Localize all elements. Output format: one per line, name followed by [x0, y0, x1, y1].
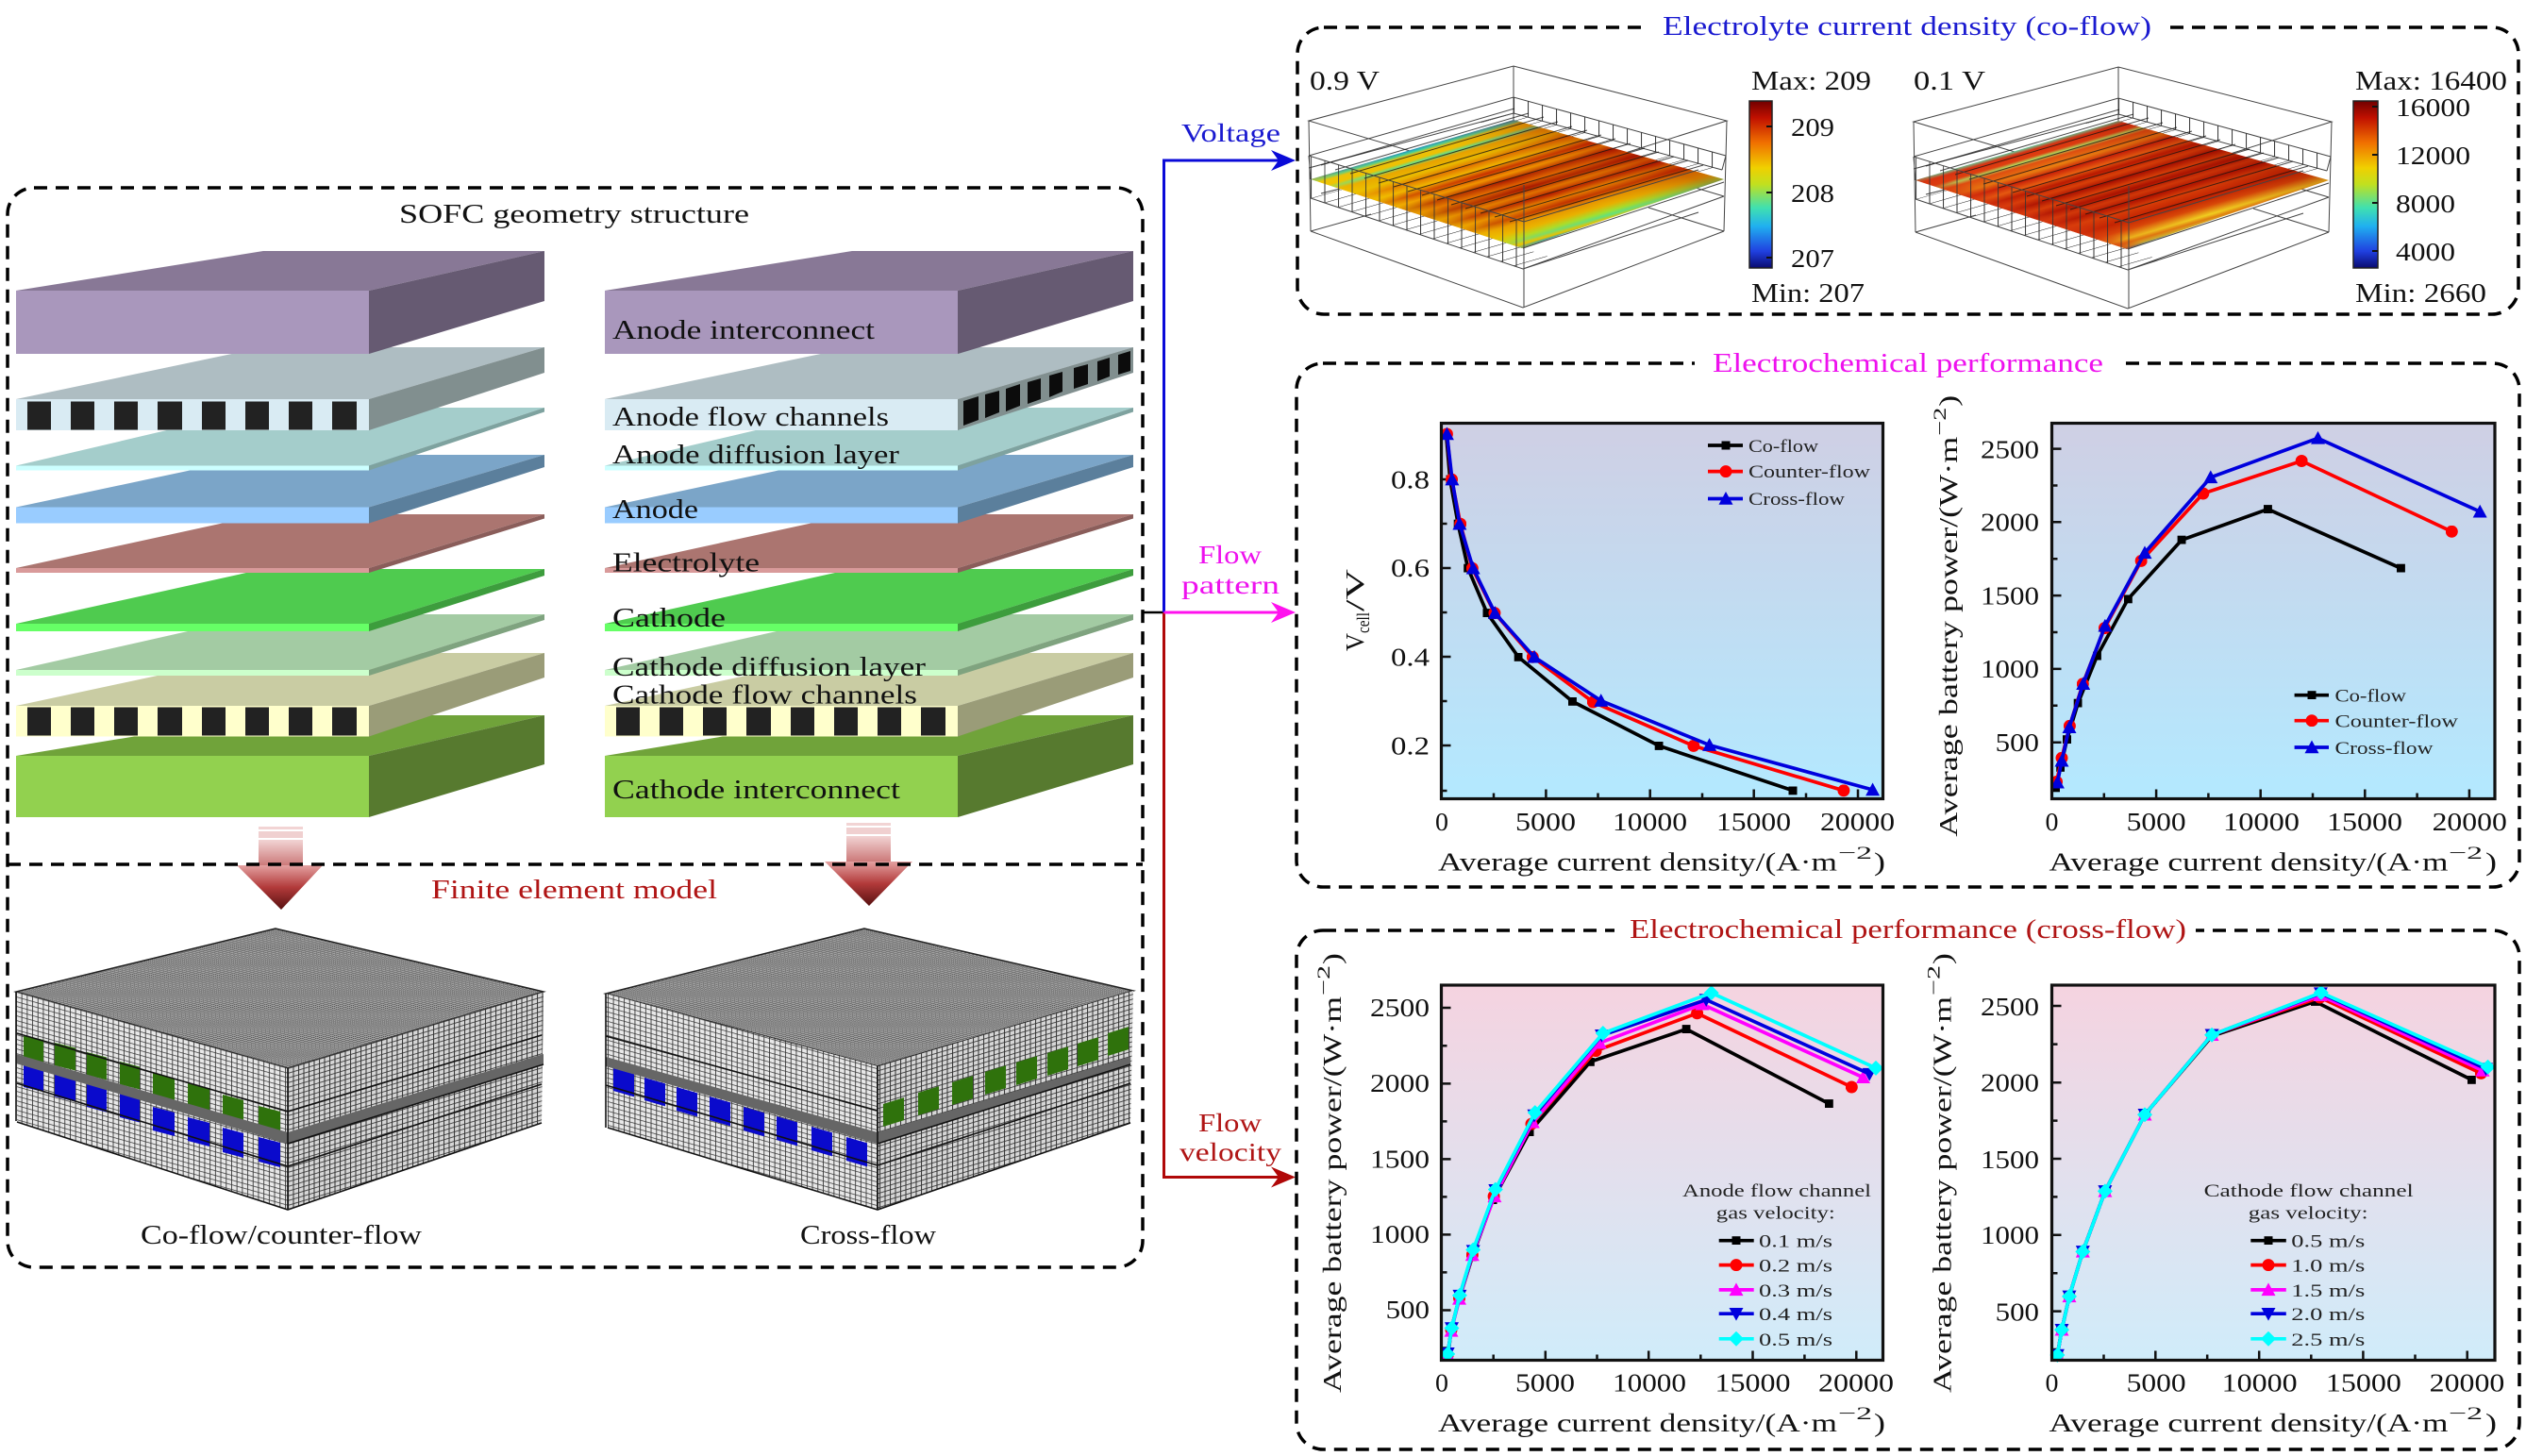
- y axis title: Average battery power/(W·m: [1318, 996, 1347, 1393]
- legend: 0.5 m/s: [2291, 1232, 2365, 1252]
- heading: finite element model: Finite element model: [431, 875, 717, 905]
- anode channels: green: [883, 1027, 1129, 1127]
- series: co-flow: [1447, 434, 1793, 791]
- series: 2.0 m/s: [2057, 994, 2485, 1355]
- y axis title: V cell / V: /V: [1341, 568, 1369, 611]
- panel: electrochemical performance: [1296, 348, 2519, 887]
- x tick labels: 15000: [2326, 1368, 2401, 1397]
- y tick labels: [1370, 994, 1430, 1324]
- series: cross-flow: [1447, 434, 1873, 790]
- layer: cathode interconnect: [16, 715, 544, 817]
- x axis title: [2049, 844, 2497, 877]
- x tick labels: 0: [1435, 1368, 1448, 1397]
- legend: 2.5 m/s: [2291, 1330, 2365, 1350]
- y axis title: ): [1934, 395, 1963, 407]
- y tick labels: 2000: [1981, 1068, 2039, 1096]
- layer: cathode diffusion layer: [605, 614, 1133, 676]
- colour bar: 207 to 209: 208: [1791, 179, 1834, 208]
- cathode channels: blue: [24, 1064, 280, 1167]
- y tick labels: 1500: [1981, 1146, 2039, 1174]
- legend: 0.3 m/s: [1759, 1281, 1832, 1301]
- series: 0.1 m/s: [1448, 1029, 1829, 1355]
- y tick labels: 1000: [1981, 655, 2039, 683]
- x tick labels: 10000: [1613, 808, 1687, 836]
- y tick labels: 2000: [1370, 1069, 1430, 1097]
- layer labels: Anode flow channels: [612, 402, 889, 432]
- legend: Cathode flow channel: [2204, 1181, 2414, 1201]
- x axis title: Average current density/(A·m: [1438, 1409, 1837, 1437]
- y tick labels: 1000: [1370, 1220, 1430, 1248]
- y tick labels: 1000: [1981, 1221, 2039, 1249]
- x axis title: −2: [2449, 844, 2483, 863]
- line chart: power vs current density by flow pattern: [1931, 395, 2507, 877]
- arrow label: flow pattern: Flow: [1198, 541, 1263, 569]
- layer: anode: [16, 455, 544, 523]
- x tick labels: 5000: [2127, 808, 2186, 836]
- x axis title: ): [1874, 1409, 1885, 1437]
- x tick labels: 15000: [1715, 1368, 1791, 1397]
- arrow label: flow velocity: [1179, 1109, 1282, 1166]
- layer labels: Cathode diffusion layer: [612, 652, 926, 682]
- y tick labels: 0.6: [1391, 554, 1430, 582]
- arrow label: voltage: Voltage: [1181, 119, 1280, 147]
- electrolyte band: [16, 1054, 544, 1144]
- layer: cathode: [16, 569, 544, 631]
- series: 1.5 m/s: [2057, 996, 2483, 1355]
- y tick labels: 2500: [1370, 994, 1430, 1022]
- line chart: anode flow channel gas velocity: [1314, 953, 1894, 1437]
- layer labels: Anode: [612, 494, 698, 525]
- x tick labels: 15000: [1716, 808, 1791, 836]
- layer: cathode flow channels: [16, 653, 544, 736]
- layer labels: Electrolyte: [612, 547, 760, 577]
- x tick labels: 0: [2046, 808, 2059, 836]
- label: max 209: Max: 209: [1751, 66, 1871, 96]
- y axis title: ): [1929, 953, 1957, 964]
- cathode channels: blue: [613, 1068, 867, 1166]
- exploded stack: right column: [605, 251, 1133, 817]
- arrow label: flow velocity: Flow: [1198, 1109, 1263, 1137]
- legend: [1682, 1181, 1871, 1350]
- legend: 2.0 m/s: [2291, 1305, 2365, 1325]
- y tick labels: 0.2: [1391, 732, 1430, 761]
- series: co-flow: [2056, 510, 2401, 788]
- x axis title: −2: [2449, 1404, 2483, 1424]
- x axis title: ): [1874, 848, 1885, 877]
- y axis title: −2: [1931, 408, 1950, 436]
- legend: Counter-flow: [2334, 712, 2458, 732]
- layer: cathode diffusion layer: [16, 614, 544, 676]
- panel: SOFC geometry structure and finite element model: [8, 188, 1143, 1267]
- colour bar: 207 to 209: 209: [1791, 113, 1834, 142]
- caption: co-flow/counter-flow: Co-flow/counter-flow: [141, 1220, 422, 1250]
- y tick labels: 2000: [1981, 509, 2039, 537]
- layer: anode interconnect: [605, 251, 1133, 354]
- colour bar: 2660 to 16400: [2353, 93, 2470, 268]
- arrow: stack to cross-flow mesh: [825, 823, 912, 906]
- legend: 0.4 m/s: [1759, 1305, 1832, 1325]
- y tick labels: 500: [1386, 1296, 1430, 1324]
- layer: cathode interconnect: [605, 715, 1133, 817]
- layer labels: Anode interconnect: [612, 315, 875, 345]
- y axis title: V cell / V: [1341, 568, 1374, 651]
- x tick labels: 5000: [1515, 808, 1576, 836]
- y tick labels: 0.8: [1391, 465, 1430, 494]
- arrow: stack to co-flow mesh: [237, 827, 323, 910]
- series: counter-flow: [1447, 434, 1844, 791]
- layer: anode diffusion layer: [16, 408, 544, 470]
- legend: Anode flow channel: [1682, 1181, 1871, 1201]
- x tick labels: 15000: [2327, 808, 2402, 836]
- series: 0.5 m/s: [1447, 993, 1876, 1354]
- x tick labels: 5000: [2127, 1368, 2186, 1397]
- heading: SOFC geometry structure: SOFC geometry structure: [399, 199, 749, 229]
- y axis title: Average battery power/(W·m: [1934, 437, 1963, 837]
- mesh: cross-flow cube: [606, 929, 1133, 1210]
- layer labels: [612, 315, 926, 805]
- legend: [1708, 437, 1870, 510]
- legend: gas velocity:: [1716, 1204, 1835, 1224]
- layer: cathode: [605, 569, 1133, 631]
- layer: anode: [605, 455, 1133, 523]
- y axis title: V cell / V: cell: [1354, 612, 1374, 633]
- colour bar: 207 to 209: [1749, 101, 1834, 273]
- x axis title: Average current density/(A·m: [2049, 1409, 2448, 1437]
- x tick labels: 20000: [2433, 808, 2507, 836]
- layer labels: Cathode interconnect: [612, 775, 900, 805]
- x tick labels: 10000: [2222, 1368, 2298, 1397]
- y axis title: [1925, 953, 1957, 1393]
- y axis title: V cell / V: V: [1341, 633, 1369, 651]
- layer: anode flow channels with side-face channels: [605, 347, 1133, 430]
- heading: electrochemical performance (cross-flow): Electrochemical performance (cross-flow): [1630, 914, 2186, 945]
- panel: electrochemical performance (cross-flow): [1296, 914, 2519, 1449]
- legend: gas velocity:: [2249, 1204, 2368, 1224]
- series: 0.4 m/s: [1447, 1000, 1869, 1353]
- panel: electrolyte current density (co-flow): [1297, 9, 2518, 314]
- legend: 1.5 m/s: [2291, 1281, 2365, 1301]
- x axis title: Average current density/(A·m: [2049, 848, 2448, 877]
- y tick labels: 1500: [1370, 1146, 1430, 1174]
- contour plot: 0.9 V: [1309, 66, 1727, 308]
- layer: anode interconnect: [16, 251, 544, 354]
- label: min 2660: Min: 2660: [2355, 278, 2486, 309]
- x tick labels: 20000: [2430, 1368, 2504, 1397]
- heading: electrolyte current density: Electrolyte current density (co-flow): [1663, 11, 2151, 42]
- arrows: flow connectors: [1143, 150, 1296, 1187]
- label: 0.9 V: 0.9 V: [1310, 66, 1380, 96]
- series: counter-flow: [2057, 460, 2451, 781]
- label: max 16400: Max: 16400: [2355, 66, 2507, 96]
- electrolyte band: [606, 1057, 1130, 1144]
- series: 2.5 m/s: [2057, 993, 2488, 1355]
- series: 0.5 m/s: [2057, 1001, 2471, 1355]
- x axis title: ): [2485, 848, 2497, 877]
- x axis title: −2: [1838, 844, 1872, 863]
- series: 0.3 m/s: [1447, 1004, 1863, 1355]
- anode channels: green: [24, 1035, 280, 1135]
- x tick labels: 20000: [1818, 1368, 1894, 1397]
- x axis title: [1438, 844, 1885, 877]
- legend: Counter-flow: [1748, 462, 1870, 482]
- y axis title: Average battery power/(W·m: [1929, 996, 1957, 1393]
- y tick labels: 2500: [1981, 993, 2039, 1021]
- y tick labels: 0.4: [1391, 644, 1430, 672]
- line chart: cell voltage vs current density: [1341, 423, 1895, 877]
- x tick labels: 5000: [1515, 1368, 1575, 1397]
- mesh: co-flow / counter-flow cube: [16, 929, 544, 1210]
- layer labels: Cathode: [612, 603, 726, 633]
- y tick labels: [1391, 465, 1430, 761]
- legend: [2295, 687, 2458, 759]
- x tick labels: 10000: [2223, 808, 2300, 836]
- y axis title: ): [1318, 953, 1347, 964]
- label: min 207: Min: 207: [1751, 278, 1865, 309]
- caption: cross-flow: Cross-flow: [800, 1220, 936, 1250]
- legend: Cross-flow: [2334, 739, 2434, 759]
- y axis title: [1931, 395, 1963, 837]
- x tick labels: 0: [1435, 808, 1448, 836]
- legend: Co-flow: [1748, 437, 1818, 457]
- x tick labels: 20000: [1820, 808, 1895, 836]
- series: 0.2 m/s: [1447, 1013, 1851, 1355]
- arrow label: flow pattern: pattern: [1181, 571, 1280, 599]
- layer: electrolyte: [605, 514, 1133, 573]
- line chart: cathode flow channel gas velocity: [1925, 953, 2504, 1437]
- y tick labels: [1981, 993, 2039, 1327]
- layer: anode flow channels: [16, 347, 544, 430]
- colour bar: 2660 to 16400: 8000: [2396, 190, 2455, 218]
- legend: Cross-flow: [1748, 490, 1845, 510]
- label: 0.1 V: 0.1 V: [1914, 66, 1985, 96]
- layer: electrolyte: [16, 514, 544, 573]
- layer: anode diffusion layer: [605, 408, 1133, 470]
- arrow label: flow pattern: [1181, 541, 1280, 599]
- x tick labels: [1435, 808, 1895, 836]
- colour bar: 207 to 209: 207: [1791, 244, 1834, 273]
- x axis title: Average current density/(A·m: [1438, 848, 1837, 877]
- contour plot: 0.1 V: [1914, 67, 2332, 309]
- y tick labels: 500: [1996, 728, 2039, 757]
- series: 1.0 m/s: [2057, 997, 2481, 1355]
- heading: electrochemical performance: Electrochemical performance: [1713, 348, 2103, 378]
- y tick labels: 1500: [1981, 581, 2039, 610]
- legend: 0.1 m/s: [1759, 1232, 1832, 1252]
- legend: 0.2 m/s: [1759, 1257, 1832, 1277]
- y tick labels: [1981, 436, 2039, 757]
- y tick labels: 500: [1996, 1298, 2039, 1327]
- x axis title: [2049, 1404, 2497, 1437]
- colour bar: 2660 to 16400: 16000: [2396, 93, 2470, 122]
- series: cross-flow: [2057, 438, 2480, 782]
- legend: 0.5 m/s: [1759, 1330, 1832, 1350]
- x tick labels: [2046, 808, 2507, 836]
- layer labels: Cathode flow channels: [612, 679, 917, 710]
- y tick labels: 2500: [1981, 436, 2039, 464]
- legend: [2204, 1181, 2414, 1350]
- y axis title: [1314, 953, 1347, 1393]
- x axis title: [1438, 1404, 1885, 1437]
- arrow label: flow velocity: velocity: [1179, 1138, 1282, 1166]
- exploded stack: left column: [16, 251, 544, 817]
- x tick labels: [2046, 1368, 2504, 1397]
- x tick labels: [1435, 1368, 1894, 1397]
- colour bar: 2660 to 16400: 4000: [2396, 238, 2455, 266]
- x tick labels: 0: [2046, 1368, 2059, 1397]
- x axis title: −2: [1838, 1404, 1872, 1424]
- y axis title: −2: [1314, 965, 1334, 996]
- legend: Co-flow: [2334, 687, 2406, 707]
- layer: cathode flow channels: [605, 653, 1133, 736]
- y axis title: −2: [1925, 965, 1945, 996]
- layer labels: Anode diffusion layer: [612, 440, 899, 470]
- x axis title: ): [2485, 1409, 2497, 1437]
- x tick labels: 10000: [1613, 1368, 1686, 1397]
- colour bar: 2660 to 16400: 12000: [2396, 142, 2470, 170]
- legend: 1.0 m/s: [2291, 1257, 2365, 1277]
